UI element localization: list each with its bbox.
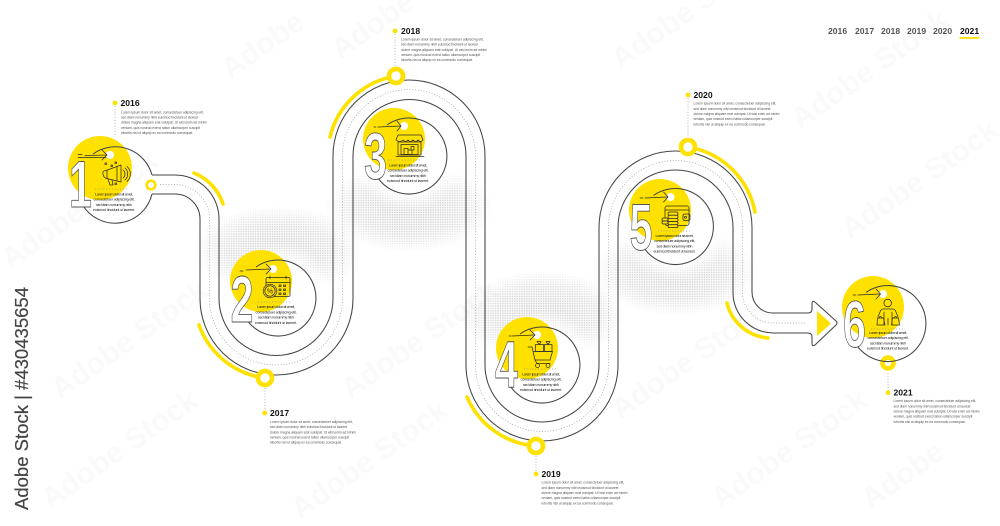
step 2: calendar percent icon: % <box>267 289 273 296</box>
step 1: caption: Lorem ipsum dolor sit amet, <box>95 192 133 196</box>
step 1: circle <box>78 147 152 223</box>
step 3: caption: euismod tincidunt ut laoreet. <box>387 179 429 183</box>
step 1: caption: euismod tincidunt ut laoreet. <box>93 208 135 212</box>
watermark pattern: Adobe Stock <box>285 393 454 526</box>
text block: 2016: 2016 <box>120 98 140 108</box>
text block: 2018: 2018 <box>401 26 420 36</box>
text block: 2017: 2017 <box>270 408 289 418</box>
step 1: caption: consectetuer adipiscing elit, <box>94 198 135 202</box>
step 5: circle <box>640 189 713 265</box>
road: winding track with arrow <box>152 80 837 441</box>
step 1: caption <box>93 192 135 212</box>
text block: 2019: Lorem ipsum dolor sit amet, consectetuer adipiscing elit, <box>542 481 624 485</box>
step 5: caption: euismod tincidunt ut laoreet. <box>654 250 696 254</box>
step 5: wallet and coins icon <box>662 206 690 228</box>
text block: 2016: Lorem ipsum dolor sit amet, consectetuer adipiscing elit, <box>121 110 204 114</box>
text block: 2017: sed diam nonummy nibh euismod tincidunt ut laoreet <box>270 425 347 429</box>
step 4: caption: euismod tincidunt ut laoreet. <box>520 388 562 392</box>
halftone shadows <box>200 178 750 345</box>
text block: 2018: veniam, quis nostrud exerci tation ullamcorper suscipit <box>401 53 480 57</box>
text block: 2020: veniam, quis nostrud exerci tation ullamcorper suscipit <box>694 117 773 121</box>
stock id side label: Adobe Stock | #430435654 <box>12 287 32 510</box>
step 2: circle <box>240 260 316 336</box>
text block: 2021: 2021 <box>894 388 913 398</box>
year navigation: 2021 <box>960 26 979 36</box>
step 2: caption: euismod tincidunt ut laoreet. <box>255 321 297 325</box>
step 5: caption: Lorem ipsum dolor sit amet, <box>656 234 694 238</box>
connector dotted lines <box>115 34 888 471</box>
text block: 2019: lobortis nisl ut aliquip ex ea commodo consequat. <box>542 501 614 505</box>
year navigation: 2018 <box>881 26 900 36</box>
year navigation <box>828 26 980 39</box>
step 3: caption: Lorem ipsum dolor sit amet, <box>389 164 427 168</box>
text block: 2020 <box>686 90 780 126</box>
year navigation: 2016 <box>828 26 847 36</box>
step 4: circle <box>509 327 580 403</box>
step 6: caption: euismod tincidunt ut laoreet. <box>867 346 909 350</box>
text block: 2017: dolore magna aliquam erat volutpat. Ut wisi enim ad minim <box>270 430 356 434</box>
step 6: circle <box>853 286 926 362</box>
text block: 2021 <box>886 388 980 424</box>
step 3: market stall icon <box>396 135 424 156</box>
text block: 2018: dolore magna aliquam erat volutpat. Ut wisi enim ad minim <box>401 48 487 52</box>
step 6: numeral: 6 <box>843 287 866 361</box>
step 3: circle <box>374 118 447 194</box>
text block: 2016: veniam, quis nostrud exerci tation ullamcorper suscipit <box>121 126 200 130</box>
text block: 2021: sed diam nonummy nibh euismod tincidunt ut laoreet <box>894 404 971 408</box>
text block: 2016: lobortis nisl ut aliquip ex ea commodo consequat. <box>121 131 193 135</box>
step 5: numeral: 5 <box>630 190 652 264</box>
step 1: numeral: 1 <box>69 147 92 221</box>
step 2: caption: Lorem ipsum dolor sit amet, <box>257 305 295 309</box>
text block: 2020: sed diam nonummy nibh euismod tincidunt ut laoreet <box>694 107 771 111</box>
step 4: caption: Lorem ipsum dolor sit amet, <box>522 372 560 376</box>
text block: 2019: dolore magna aliquam erat volutpat. Ut wisi enim ad minim <box>542 491 628 495</box>
step 5: caption <box>654 234 696 254</box>
yellow circles <box>68 108 904 379</box>
step 3: numeral: 3 <box>364 119 387 193</box>
text block: 2019: sed diam nonummy nibh euismod tincidunt ut laoreet <box>542 486 619 490</box>
text block: 2016 <box>113 98 207 135</box>
step 2: caption: sed diam nonummy nibh <box>258 316 294 320</box>
step 5: caption: sed diam nonummy nibh <box>656 244 692 248</box>
text block: 2021: Lorem ipsum dolor sit amet, consectetuer adipiscing elit, <box>894 399 976 403</box>
text block: 2018 <box>393 26 487 62</box>
step 1: caption: sed diam nonummy nibh <box>96 203 132 207</box>
node rings <box>147 69 893 453</box>
step 1: megaphone icon <box>103 162 130 185</box>
text block: 2020: 2020 <box>694 90 713 100</box>
text block: 2021: dolore magna aliquam erat volutpat. Ut wisi enim ad minim <box>894 410 980 414</box>
text block: 2017: Lorem ipsum dolor sit amet, consectetuer adipiscing elit, <box>270 420 353 424</box>
text block: 2017 <box>262 408 356 445</box>
step 4: shopping cart icon <box>528 342 552 368</box>
watermark pattern: Adobe Stock <box>0 143 164 276</box>
yellow progress arcs <box>194 76 768 446</box>
step 4: caption: consectetuer adipiscing elit, <box>520 378 562 382</box>
step 4: caption <box>520 372 562 392</box>
step 6: caption: consectetuer adipiscing elit, <box>868 336 909 340</box>
step 2: calendar percent icon <box>263 276 290 298</box>
text block: 2017: lobortis nisl ut aliquip ex ea commodo consequat. <box>270 441 342 445</box>
text block: 2021: veniam, quis nostrud exerci tation ullamcorper suscipit <box>894 415 973 419</box>
step 6: caption: Lorem ipsum dolor sit amet, <box>869 331 907 335</box>
year navigation: 2017 <box>855 26 874 36</box>
text block: 2017: veniam, quis nostrud exerci tation ullamcorper suscipit <box>270 436 349 440</box>
text block: 2016: sed diam nonummy nibh euismod tincidunt ut laoreet <box>121 116 198 120</box>
watermark pattern: Adobe Stock <box>35 383 204 516</box>
text block: 2020: lobortis nisl ut aliquip ex ea commodo consequat. <box>694 122 766 126</box>
step 6: shopper icon <box>877 299 900 325</box>
text block: 2019: 2019 <box>542 469 561 479</box>
text block: 2019: veniam, quis nostrud exerci tation ullamcorper suscipit <box>542 496 621 500</box>
watermark pattern: Adobe Stock <box>45 273 214 406</box>
text block: 2019 <box>534 469 628 505</box>
text block: 2021: lobortis nisl ut aliquip ex ea commodo consequat. <box>894 420 966 424</box>
watermark pattern: Adobe Stock <box>335 273 504 406</box>
arrowhead yellow triangle <box>817 311 831 336</box>
step 4: numeral: 4 <box>495 327 518 401</box>
step 4: caption: sed diam nonummy nibh <box>523 383 559 387</box>
watermark pattern: Adobe Stock <box>785 3 954 136</box>
step 3: caption: consectetuer adipiscing elit, <box>388 168 429 172</box>
watermark pattern: Adobe <box>855 435 950 516</box>
text block: 2018: Lorem ipsum dolor sit amet, consectetuer adipiscing elit, <box>401 38 484 42</box>
text block: 2020: dolore magna aliquam erat volutpat. Ut wisi enim ad minim <box>694 112 780 116</box>
year navigation: 2020 <box>933 26 952 36</box>
step 5: caption: consectetuer adipiscing elit, <box>654 239 695 243</box>
watermark pattern: Adobe <box>215 5 310 86</box>
step 2: numeral: 2 <box>231 262 253 336</box>
step 6: caption: sed diam nonummy nibh <box>870 341 906 345</box>
year navigation: 2019 <box>907 26 926 36</box>
text block: 2016: dolore magna aliquam erat volutpat. Ut wisi enim ad minim <box>121 121 207 125</box>
text block: 2018: sed diam nonummy nibh euismod tincidunt ut laoreet <box>401 43 478 47</box>
step 3: caption <box>387 164 429 183</box>
step 3: caption: sed diam nonummy nibh <box>390 174 426 178</box>
text block: 2018: lobortis nisl ut aliquip ex ea commodo consequat. <box>401 58 473 62</box>
watermark pattern: Adobe Stock <box>605 293 774 426</box>
step 2: caption <box>255 305 297 325</box>
step 2: caption: consectetuer adipiscing elit, <box>256 310 297 314</box>
watermark pattern: Adobe Stock <box>705 383 874 516</box>
text block: 2020: Lorem ipsum dolor sit amet, consectetuer adipiscing elit, <box>694 102 776 106</box>
watermark pattern: Adobe Stock <box>835 113 1000 246</box>
step 6: caption <box>867 331 909 350</box>
